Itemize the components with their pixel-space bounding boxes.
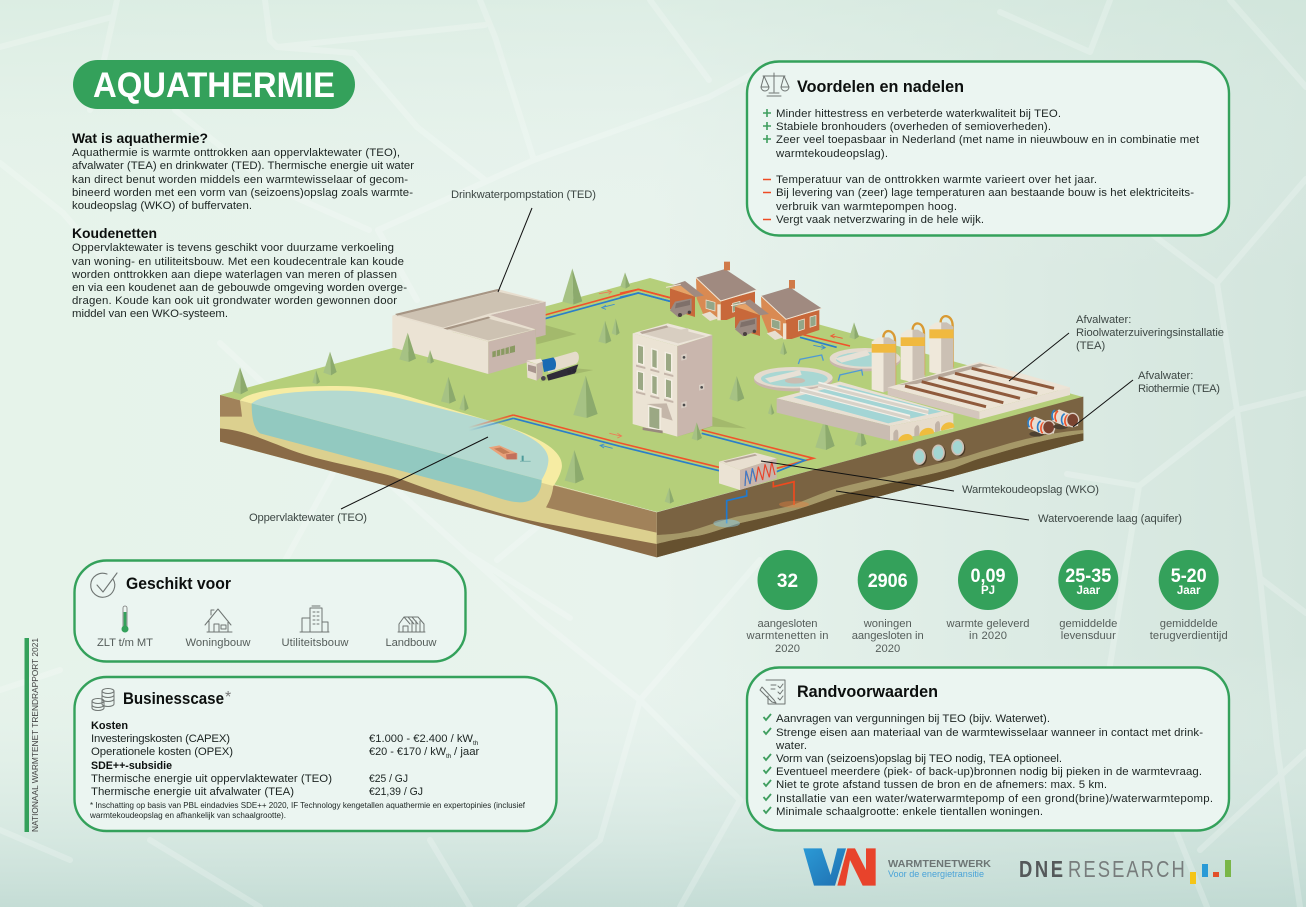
section: SDE++-subsidie: Thermische energie uit oppervlaktewater (TEO) <box>91 773 332 785</box>
text block: koudenetten: Oppervlaktewater is tevens geschikt voor duurzame verkoeling <box>72 242 394 254</box>
section: kosten: Investeringskosten (CAPEX) <box>91 733 230 745</box>
side label: NATIONAAL WARMTENET TRENDRAPPORT 2021 <box>31 637 40 832</box>
panel: geschikt voor <box>74 560 466 662</box>
list: nadelen: verbruik van warmtepompen hoog. <box>776 201 957 213</box>
section: kosten <box>91 720 480 760</box>
section: kosten: €1.000 - €2.400 / kW <box>369 733 473 745</box>
panel: randvoorwaarden <box>747 668 1229 830</box>
east pipes, trees and soil details <box>620 289 867 527</box>
stat: woningen aangesloten <box>852 550 924 655</box>
item: utiliteitsbouw <box>282 606 349 649</box>
stat: warmte geleverd: 0,09 <box>970 566 1006 587</box>
section: kosten: th <box>473 740 479 747</box>
section: kosten: th <box>446 753 452 760</box>
stat: terugverdientijd: 5-20 <box>1171 566 1207 587</box>
stat: aangesloten warmtenetten: warmtenetten in <box>746 630 828 642</box>
label: Warmtekoudeopslag: Warmtekoudeopslag (WKO) <box>962 484 1099 496</box>
stat: terugverdientijd <box>1150 550 1228 642</box>
checklist items: Eventueel meerdere (piek- of back-up)bronnen nodig bij pieken in de warmtevraag. <box>776 766 1202 778</box>
text block: wat is aquathermie: Aquathermie is warmte onttrokken aan oppervlaktewater (TEO), <box>72 147 400 159</box>
logo: warmtenetwerk: WARMTENETWERK <box>888 858 991 870</box>
item: landbouw: Landbouw <box>386 637 437 649</box>
checklist items: Vorm van (seizoens)opslag bij TEO nodig, TEA optioneel. <box>776 753 1062 765</box>
icon: check <box>91 573 117 597</box>
section: kosten: Operationele kosten (OPEX) <box>91 746 233 758</box>
section: kosten: / jaar <box>454 746 480 758</box>
truck and office <box>527 323 747 437</box>
label: Watervoerende laag <box>836 491 1182 525</box>
panel: businesscase <box>74 677 556 831</box>
heading: Businesscase <box>123 690 224 708</box>
stat: levensduur: 25-35 <box>1065 566 1112 587</box>
stat: woningen aangesloten: aangesloten in <box>852 630 924 642</box>
arrows <box>599 290 612 294</box>
trees west <box>233 367 241 394</box>
panel: businesscase: * <box>225 689 231 706</box>
item: landbouw <box>386 617 437 649</box>
text block: koudenetten: Koudenetten <box>72 225 157 241</box>
label: Drinkwaterpompstation <box>451 189 596 292</box>
label: Rioolwaterzuiveringsinstallatie: Afvalwater: <box>1076 314 1131 326</box>
lake and left soil face <box>220 268 670 557</box>
label: Riothermie: Riothermie (TEA) <box>1138 383 1220 395</box>
house 2 <box>731 280 822 340</box>
stat: warmte geleverd: warmte geleverd <box>946 618 1030 630</box>
logo: warmtenetwerk: Voor de energietransitie <box>888 869 984 879</box>
stat: woningen aangesloten: 2906 <box>868 571 908 592</box>
checklist items: Minimale schaalgrootte: enkele tientallen woningen. <box>776 806 1043 818</box>
digester tanks <box>872 316 953 392</box>
outfall holes <box>914 440 965 466</box>
text block: koudenetten: middel van een WKO-systeem. <box>72 308 228 320</box>
stat: terugverdientijd: Jaar <box>1177 585 1201 597</box>
text block: wat is aquathermie: kan direct benut worden middels een warmtewisselaar of gecom- <box>72 174 408 186</box>
label: Rioolwaterzuiveringsinstallatie: (TEA) <box>1076 340 1105 352</box>
stat: levensduur: levensduur <box>1061 630 1116 642</box>
text block: wat is aquathermie: bineerd worden met een vorm van (seizoens)opslag zoals warmte- <box>72 187 413 199</box>
section: kosten: Kosten <box>91 720 128 732</box>
text block: koudenetten: en via een koudenet aan de gebouwde omgeving worden overge- <box>72 282 407 294</box>
checklist items: Installatie van een water/waterwarmtepomp of een grond(brine)/waterwarmtepomp. <box>776 793 1213 805</box>
logo: DNE research: DNE <box>1019 857 1063 883</box>
side label <box>24 637 40 832</box>
list: voordelen: warmtekoudeopslag). <box>775 148 888 160</box>
stat: terugverdientijd: gemiddelde <box>1160 618 1218 630</box>
title pill: AQUATHERMIE <box>93 66 335 105</box>
riothermie pipes <box>1027 409 1079 437</box>
checklist items: Strenge eisen aan materiaal van de warmtewisselaar wanneer in contact met drink- <box>776 727 1203 739</box>
list: voordelen: Zeer veel toepasbaar in Nederland (met name in nieuwbouw en in combinatie met <box>776 134 1200 146</box>
checklist items: Aanvragen van vergunningen bij TEO (bijv. Waterwet). <box>776 713 1050 725</box>
pipes east <box>620 289 670 298</box>
label: Riothermie: Afvalwater: <box>1138 370 1193 382</box>
label: Rioolwaterzuiveringsinstallatie <box>1009 314 1224 381</box>
house 1 <box>666 262 757 321</box>
text block: wat is aquathermie: afvalwater (TEA) en drinkwater (TED). Thermische energie uit water <box>72 160 414 172</box>
icon: coins <box>92 688 114 710</box>
stat: warmte geleverd: PJ <box>981 585 995 597</box>
pump station building <box>392 289 577 374</box>
label: Watervoerende laag: Watervoerende laag (aquifer) <box>1038 513 1182 525</box>
section: SDE++-subsidie: SDE++-subsidie <box>91 760 172 772</box>
footnote <box>89 801 526 820</box>
icon: checklist <box>760 680 785 704</box>
houses <box>666 262 822 340</box>
label: Riothermie <box>1073 370 1220 427</box>
stat: warmte geleverd <box>946 550 1030 642</box>
panel: voordelen en nadelen <box>747 62 1229 236</box>
ground surface <box>220 278 1083 512</box>
item: thermometer <box>97 606 153 649</box>
boat <box>489 445 531 461</box>
icon: scales <box>761 73 789 96</box>
right soil face <box>657 397 1083 557</box>
text block: wat is aquathermie <box>72 130 414 212</box>
text block: koudenetten: van woning- en utiliteitsbouw. Met een koudecentrale kan koude <box>72 256 404 268</box>
list: voordelen: Stabiele bronhouders (overheden of semioverheden). <box>776 121 1051 133</box>
text block: koudenetten: dragen. Koude kan ook uit grondwater worden gewonnen door <box>72 295 397 307</box>
list: voordelen: Minder hittestress en verbeterde waterkwaliteit bij TEO. <box>776 108 1061 120</box>
heading: Randvoorwaarden <box>797 683 938 701</box>
label: Warmtekoudeopslag <box>761 461 1099 496</box>
checklist items <box>764 713 1213 818</box>
label: Oppervlaktewater <box>249 437 488 524</box>
clarifiers <box>754 348 900 391</box>
stat: terugverdientijd: terugverdientijd <box>1150 630 1228 642</box>
footnote: warmtekoudeopslag en afhankelijk van schaalgrootte). <box>89 811 286 820</box>
list: nadelen <box>763 174 1194 226</box>
stat: warmte geleverd: in 2020 <box>969 630 1007 642</box>
text block: koudenetten <box>71 225 407 320</box>
list: nadelen: Temperatuur van de onttrokken warmte varieert over het jaar. <box>776 174 1097 186</box>
list: voordelen <box>763 108 1200 160</box>
pipes: top <box>545 289 670 315</box>
label: Rioolwaterzuiveringsinstallatie: Rioolwaterzuiveringsinstallatie <box>1076 327 1224 339</box>
treatment plant <box>754 316 1079 466</box>
stat: levensduur <box>1058 550 1118 642</box>
list: nadelen: Vergt vaak netverzwaring in de hele wijk. <box>776 214 984 226</box>
checklist items: water. <box>775 740 807 752</box>
section: SDE++-subsidie: Thermische energie uit afvalwater (TEA) <box>91 786 294 798</box>
office building <box>633 323 747 437</box>
item: woningbouw: Woningbouw <box>186 637 251 649</box>
logo: warmtenetwerk <box>803 848 991 886</box>
logo: DNE research: RESEARCH <box>1068 857 1185 883</box>
section: kosten: €20 - €170 / kW <box>369 746 446 758</box>
trees east <box>849 322 855 339</box>
item: utiliteitsbouw: Utiliteitsbouw <box>282 637 349 649</box>
stat: woningen aangesloten: 2020 <box>875 643 900 655</box>
sludge beds <box>888 362 1070 419</box>
logo: DNE research <box>1019 857 1231 884</box>
isometric platform illustration <box>220 262 1083 557</box>
pipes: lake to centre <box>468 415 513 428</box>
section: SDE++-subsidie: €25 / GJ <box>369 773 408 785</box>
stat: aangesloten warmtenetten: 32 <box>777 571 798 592</box>
stat: aangesloten warmtenetten: aangesloten <box>758 618 818 630</box>
WKO unit <box>713 453 809 527</box>
heading: Geschikt voor <box>126 575 232 593</box>
checklist items: Niet te grote afstand tussen de bron en de afnemers: max. 5 km. <box>776 779 1107 791</box>
settling basin <box>777 382 954 442</box>
tanker truck <box>527 352 593 382</box>
stat: levensduur: Jaar <box>1076 585 1101 597</box>
footnote: * Inschatting op basis van PBL eindadvies SDE++ 2020, IF Technology kengetallen aquathermie en expertopinies (inclusief <box>90 801 526 810</box>
label: Oppervlaktewater: Oppervlaktewater (TEO) <box>249 512 367 524</box>
text block: wat is aquathermie: koudeopslag (WKO) of buffervaten. <box>72 200 252 212</box>
text block: wat is aquathermie: Wat is aquathermie? <box>72 130 208 146</box>
section: SDE++-subsidie <box>91 760 423 798</box>
label: Drinkwaterpompstation: Drinkwaterpompstation (TED) <box>451 189 596 201</box>
heading: Voordelen en nadelen <box>797 78 964 96</box>
item: thermometer: ZLT t/m MT <box>97 637 153 649</box>
item: woningbouw <box>186 609 251 649</box>
stat: levensduur: gemiddelde <box>1059 618 1117 630</box>
stat: aangesloten warmtenetten: 2020 <box>775 643 800 655</box>
list: nadelen: Bij levering van (zeer) lage temperaturen aan bestaande bouw is het elektriciteits- <box>776 187 1194 199</box>
stat: woningen aangesloten: woningen <box>863 618 912 630</box>
text block: koudenetten: worden onttrokken aan diepe waterlagen van meren of plassen <box>71 269 397 281</box>
stat: aangesloten warmtenetten <box>746 550 828 655</box>
section: SDE++-subsidie: €21,39 / GJ <box>369 786 423 798</box>
